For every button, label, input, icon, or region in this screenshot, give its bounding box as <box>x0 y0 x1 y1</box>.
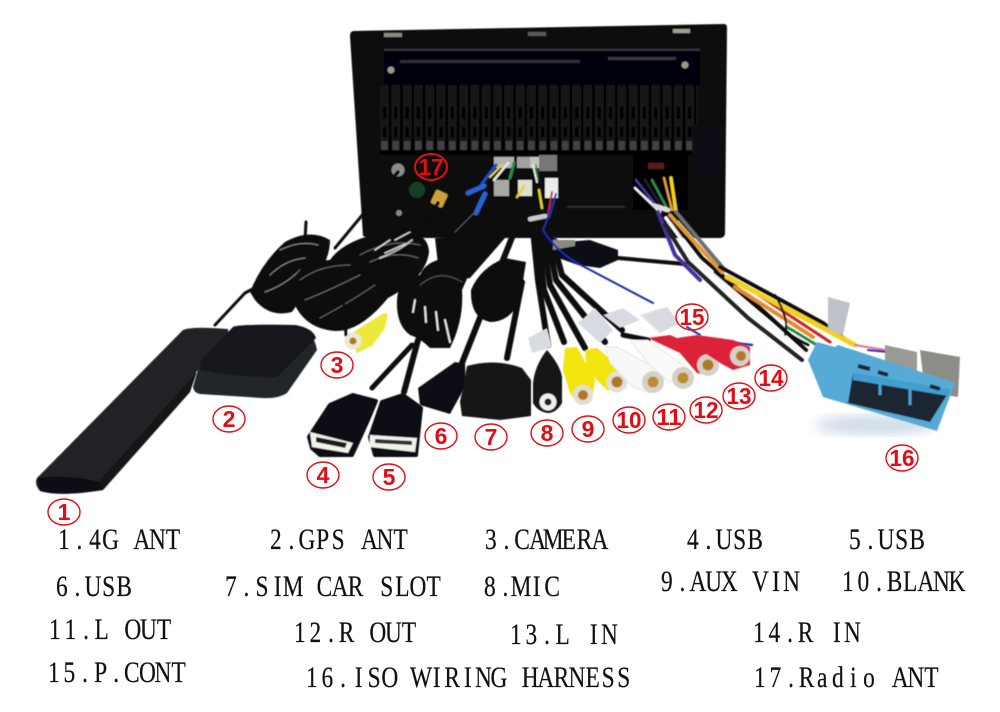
legend row 2: 10.BLANK <box>842 564 966 598</box>
legend row 3: 11.L OUT <box>49 612 171 646</box>
marker 1 <box>48 499 80 525</box>
radio head unit rear <box>350 24 727 244</box>
1 4G antenna <box>36 328 230 494</box>
marker 3: 3 <box>331 352 343 378</box>
12 and 13 red plugs <box>648 335 750 376</box>
6 USB dongle <box>418 362 466 414</box>
marker 11: 11 <box>656 404 682 430</box>
marker 9 <box>572 416 604 442</box>
marker 1: 1 <box>58 499 71 525</box>
legend row 4: 15.P.CONT <box>48 655 186 689</box>
legend row 3 <box>49 612 861 651</box>
legend row 1 <box>58 522 925 556</box>
3 camera RCA plug <box>344 313 388 353</box>
coil: SIM and USB adapter cables <box>460 205 526 368</box>
legend row 4: 17.Radio ANT <box>754 660 939 694</box>
marker 15: 15 <box>680 304 705 330</box>
radio connector block <box>468 155 560 244</box>
4 USB socket <box>309 395 376 455</box>
legend row 3: 13.L IN <box>510 617 618 651</box>
cable tags <box>528 307 680 353</box>
marker 5 <box>373 464 405 490</box>
marker 4: 4 <box>317 462 330 488</box>
legend row 3: 12.R OUT <box>294 615 416 649</box>
legend row 2: 6.USB <box>56 569 132 603</box>
marker 14: 14 <box>758 365 784 391</box>
marker 4 <box>307 462 339 488</box>
legend row 3: 14.R IN <box>753 615 861 649</box>
9 AUX yellow plugs <box>563 347 628 405</box>
marker 16: 16 <box>890 445 914 471</box>
numbered red markers on photo <box>48 154 918 525</box>
marker 12: 12 <box>694 397 718 423</box>
marker 7: 7 <box>485 424 497 450</box>
marker 9: 9 <box>582 416 594 442</box>
legend row 2: 8.MIC <box>484 569 560 603</box>
marker 5: 5 <box>383 464 396 490</box>
coil: GPS and camera cable <box>290 203 438 335</box>
blue wire <box>543 205 752 345</box>
legend text <box>48 522 966 694</box>
marker 8: 8 <box>541 420 554 446</box>
black cable coils and bundles <box>215 172 752 392</box>
harness wires <box>635 178 888 360</box>
7 SIM card slot <box>460 362 531 420</box>
coil: 4G antenna cable <box>215 172 398 325</box>
coil: USB cables <box>372 212 505 392</box>
legend row 1: 5.USB <box>849 522 925 556</box>
marker 8 <box>531 420 563 446</box>
marker 6 <box>425 423 457 449</box>
legend row 1: 1.4G ANT <box>58 522 180 556</box>
marker 7 <box>475 424 507 450</box>
legend row 4 <box>48 655 939 694</box>
marker 10: 10 <box>616 407 642 433</box>
legend row 2 <box>56 564 966 603</box>
marker 13: 13 <box>726 383 752 409</box>
legend row 4: 16.ISO WIRING HARNESS <box>306 660 630 694</box>
10 and 11 white plugs <box>605 340 694 393</box>
16 ISO harness connector <box>808 342 960 435</box>
marker 6: 6 <box>435 423 447 449</box>
inline barrel connector <box>553 240 685 268</box>
RCA cable fan <box>530 216 648 348</box>
legend row 1: 3.CAMERA <box>485 522 609 556</box>
legend row 2: 7.SIM CAR SLOT <box>225 569 441 603</box>
legend row 1: 4.USB <box>687 522 763 556</box>
legend row 2: 9.AUX VIN <box>661 564 800 598</box>
legend row 1: 2.GPS ANT <box>270 522 408 556</box>
8 mic jack <box>533 350 562 413</box>
marker 17: 17 <box>418 154 444 180</box>
marker 3 <box>321 352 353 378</box>
marker 2 <box>213 406 245 432</box>
marker 2: 2 <box>223 406 235 432</box>
radio antenna jack <box>392 164 448 216</box>
5 USB socket <box>370 395 421 455</box>
2 GPS antenna <box>193 325 317 398</box>
